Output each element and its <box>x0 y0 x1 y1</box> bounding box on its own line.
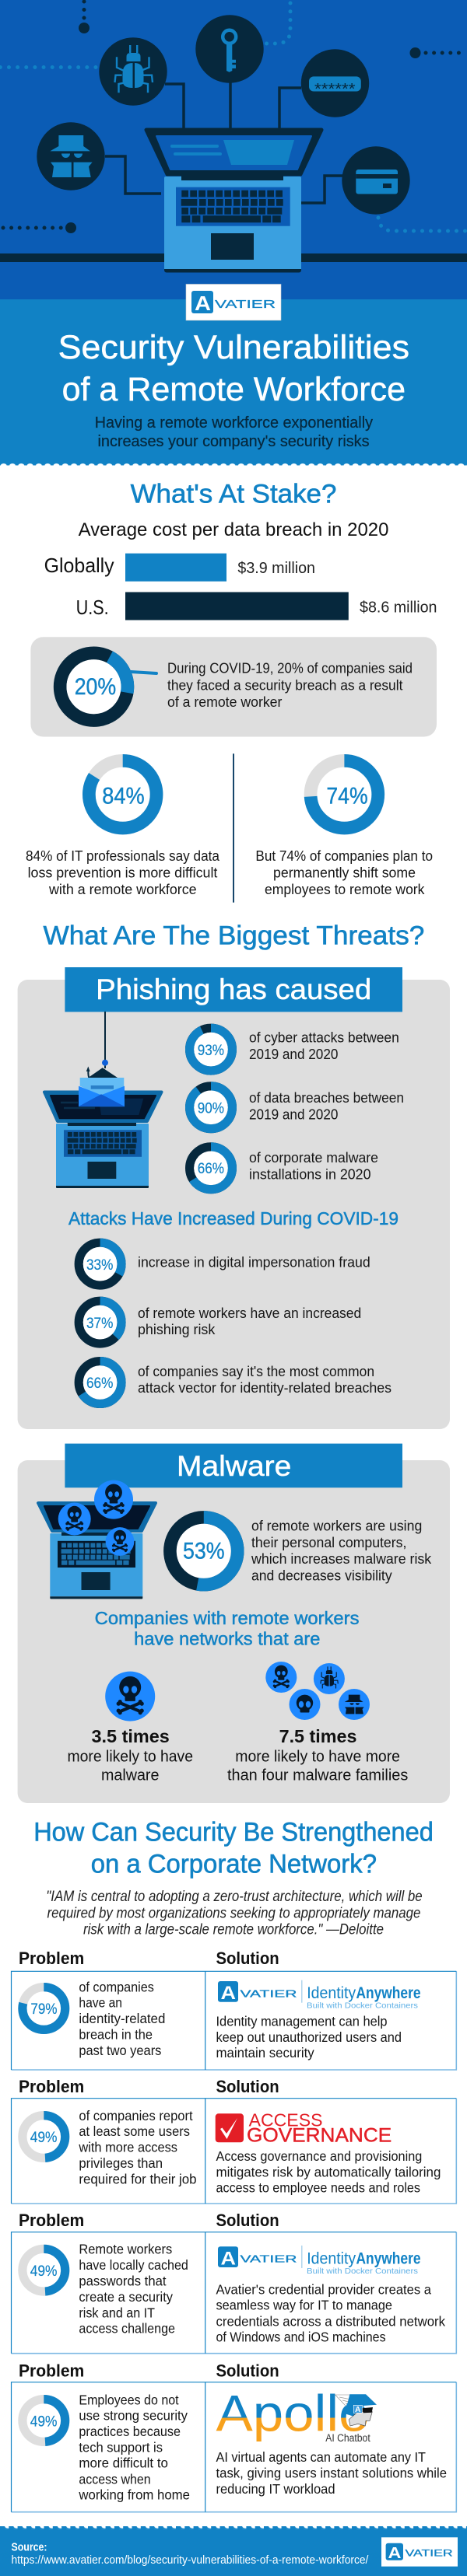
bar chart: breach cost: $3.9 million <box>237 560 315 577</box>
logo: Access Governance: ACCESS <box>249 2109 322 2130</box>
logo: Avatier Identity Anywhere <box>218 2246 420 2276</box>
icon: large skull <box>105 1672 155 1721</box>
icon: password field <box>301 49 369 117</box>
header: phishing has caused <box>65 967 402 1012</box>
logo: Avatier Identity Anywhere: Identity <box>307 1984 356 2002</box>
solution text: mitigates risk by automatically tailoring <box>216 2164 441 2179</box>
problem and solution row 4: Solution <box>216 2361 279 2381</box>
logo: Apollo AI Chatbot: AI Chatbot <box>325 2432 370 2444</box>
panel: 20% stat <box>30 637 437 737</box>
donut: 49% <box>23 2249 65 2291</box>
heading: biggest threats: What Are The Biggest Threats? <box>44 921 424 950</box>
problem text: past two years <box>79 2043 162 2058</box>
donut: 37%: 37% <box>86 1315 113 1332</box>
solution text: reducing IT workload <box>216 2481 335 2497</box>
logo: Avatier Identity Anywhere: Built with Docker Containers <box>307 2001 418 2011</box>
stat: 84%: with a remote workforce <box>48 882 197 897</box>
icon: spy <box>37 122 105 190</box>
text: data breaches: of data breaches between <box>249 1090 404 1106</box>
text: cyber attacks: 2019 and 2020 <box>249 1047 338 1062</box>
problem text: access challenge <box>79 2321 175 2337</box>
problem and solution row 3 <box>11 2211 456 2354</box>
text: phishing risk <box>138 1305 361 1337</box>
problem text: have locally cached <box>79 2257 188 2273</box>
stat: 74%: 74% <box>326 784 368 809</box>
solution text: access to employee needs and roles <box>216 2179 420 2195</box>
stat: 84%: 84% <box>102 784 145 809</box>
donut: 53% <box>170 1517 237 1585</box>
subtitle: increases your company's security risks <box>98 433 369 450</box>
stat text <box>167 661 413 710</box>
dotted circuit lines <box>0 2 467 233</box>
quote: Deloitte: risk with a large-scale remote workforce." —Deloitte <box>83 1922 384 1938</box>
logo: Avatier Identity Anywhere: A <box>221 1983 236 2004</box>
title: Security Vulnerabilities <box>58 329 409 366</box>
quote: Deloitte: "IAM is central to adopting a zero-trust architecture, which will be <box>46 1889 423 1905</box>
bar chart: breach cost <box>44 554 437 620</box>
source text: https://www.avatier.com/blog/security-vulnerabilities-of-a-remote-workforce/ <box>11 2553 369 2567</box>
header: phishing has caused: Phishing has caused <box>96 973 371 1005</box>
logo: Avatier: VATIER <box>215 299 276 311</box>
donut: 49%: 49% <box>30 2129 58 2146</box>
donut: 66% <box>79 1361 121 1403</box>
solution text <box>216 2449 447 2497</box>
donut: 33% <box>79 1243 121 1285</box>
text: phishing risk: phishing risk <box>138 1322 216 1337</box>
solution text: keep out unauthorized users and <box>216 2029 402 2045</box>
stat: 74%: But 74% of companies plan to <box>255 848 433 864</box>
panel: malware <box>18 1444 450 1803</box>
stat text: During COVID-19, 20% of companies said <box>167 661 413 676</box>
stat: 84% <box>26 760 220 897</box>
text: data breaches <box>249 1090 404 1123</box>
hero background <box>0 0 467 299</box>
stat: 74%: permanently shift some <box>273 865 416 880</box>
logo: Access Governance <box>216 2109 392 2146</box>
donut: 20%: 20% <box>75 674 116 700</box>
desk line <box>0 253 467 262</box>
solution text: of Windows and iOS machines <box>216 2330 386 2345</box>
problem text: have an <box>79 1995 122 2011</box>
stat: 74% <box>255 760 433 897</box>
problem text: with more access <box>78 2140 177 2155</box>
icon: password field: ****** <box>314 81 356 98</box>
heading: how can security be strengthened: on a Corporate Network? <box>91 1849 377 1879</box>
solution text: seamless way for IT to manage <box>216 2298 392 2313</box>
problem text: create a security <box>79 2289 173 2305</box>
problem and solution row 3: Problem <box>19 2211 84 2230</box>
logo: Avatier Identity Anywhere: Anywhere <box>356 2249 420 2267</box>
footer <box>0 2526 467 2576</box>
problem text <box>79 2242 188 2337</box>
icon: credit card <box>342 146 410 215</box>
text: personal computers: which increases malware risk <box>251 1551 432 1567</box>
text: cyber attacks: of cyber attacks between <box>249 1029 399 1045</box>
subheading: companies with remote workers: Companies with remote workers <box>95 1608 359 1628</box>
bar chart: breach cost: $8.6 million <box>360 599 437 616</box>
problem text: working from home <box>78 2487 190 2503</box>
stat: 7.5 times <box>227 1726 408 1784</box>
stat: 84%: loss prevention is more difficult <box>28 865 217 880</box>
subtitle <box>95 414 373 450</box>
solution text: Identity management can help <box>216 2014 388 2029</box>
bar chart: breach cost: Globally <box>44 554 114 577</box>
donut: 90%: 90% <box>198 1099 224 1117</box>
problem and solution row 4: Problem <box>19 2361 84 2381</box>
text: corporate malware: of corporate malware <box>249 1150 378 1166</box>
problem text: Employees do not <box>79 2392 179 2407</box>
logo: Avatier Identity Anywhere: Identity <box>307 2249 356 2267</box>
problem text: privileges than <box>79 2155 163 2171</box>
stat: 3.5 times: malware <box>101 1767 159 1784</box>
stat: 7.5 times: than four malware families <box>227 1767 408 1784</box>
quote: Deloitte: required by most organizations seeking to appropriately manage <box>47 1906 420 1922</box>
solution text <box>216 2281 445 2345</box>
stat: 7.5 times: more likely to have more <box>235 1748 400 1765</box>
logo: Avatier <box>381 2537 458 2567</box>
donut: 79%: 79% <box>30 2001 58 2018</box>
problem and solution row 2 <box>11 2077 456 2204</box>
text: personal computers: of remote workers are using <box>251 1518 422 1533</box>
heading: how can security be strengthened <box>33 1818 434 1879</box>
illustration: infected laptop <box>38 1480 156 1599</box>
donut: 90% <box>190 1086 232 1129</box>
logo: Avatier: A <box>388 2545 402 2562</box>
solution text: Access governance and provisioning <box>216 2148 422 2164</box>
solution text: Avatier's credential provider creates a <box>216 2281 431 2297</box>
heading: What's At Stake: What's At Stake? <box>131 480 336 509</box>
donut: 37% <box>79 1301 121 1344</box>
problem text <box>78 2392 190 2503</box>
problem text: of companies report <box>79 2108 193 2123</box>
subheading: companies with remote workers <box>95 1608 359 1649</box>
title: of a Remote Workforce <box>62 371 406 408</box>
subheading: attacks increased: Attacks Have Increased During COVID-19 <box>68 1208 399 1229</box>
icon: skull medium <box>58 1502 91 1535</box>
solution text: AI virtual agents can automate any IT <box>216 2449 426 2465</box>
source text <box>11 2541 369 2567</box>
problem and solution row 4 <box>11 2361 456 2512</box>
stat: 3.5 times <box>67 1726 193 1784</box>
logo: Avatier <box>186 285 281 320</box>
stat text: they faced a security breach as a result <box>167 677 402 693</box>
subheading: average cost: Average cost per data breach in 2020 <box>79 519 388 540</box>
panel: phishing <box>18 967 450 1429</box>
problem and solution row 2: Problem <box>19 2077 84 2096</box>
problem text: breach in the <box>79 2026 153 2042</box>
problem text: of companies <box>79 1979 154 1994</box>
logo: Avatier Identity Anywhere: VATIER <box>240 2253 297 2265</box>
stat text: of a remote worker <box>167 694 282 710</box>
problem text: use strong security <box>79 2408 188 2424</box>
text: attack vector: attack vector for identity-related breaches <box>138 1380 392 1396</box>
title band <box>0 299 467 465</box>
donut: 79% <box>23 1987 65 2029</box>
problem and solution row 1: Solution <box>216 1949 279 1968</box>
icon: bug <box>99 37 167 106</box>
solution text: task, giving users instant solutions while <box>216 2466 447 2481</box>
stat: 3.5 times: 3.5 times <box>92 1726 170 1746</box>
quote: Deloitte <box>46 1889 423 1938</box>
donut: 49% <box>23 2399 65 2441</box>
logo: Avatier Identity Anywhere: Anywhere <box>356 1984 420 2002</box>
subtitle: Having a remote workforce exponentially <box>95 414 373 432</box>
text: impersonation fraud: increase in digital impersonation fraud <box>138 1254 370 1270</box>
header: malware <box>65 1444 402 1487</box>
logo: Apollo AI Chatbot: Apollo <box>216 2385 369 2442</box>
stat: 84%: 84% of IT professionals say data <box>26 848 220 864</box>
text: attack vector: of companies say it's the most common <box>138 1364 374 1379</box>
text: data breaches: 2019 and 2020 <box>249 1107 338 1123</box>
donut: 49%: 49% <box>30 2263 58 2280</box>
icon: skull small <box>106 1527 134 1556</box>
donut: 49% <box>23 2116 65 2158</box>
problem text: passwords that <box>79 2273 167 2288</box>
text: corporate malware <box>249 1150 378 1182</box>
header: malware: Malware <box>177 1450 291 1482</box>
icon: skull large <box>94 1480 133 1519</box>
logo: Avatier: A <box>195 292 211 315</box>
problem text: practices because <box>79 2424 181 2439</box>
problem and solution row 1: Problem <box>19 1949 84 1968</box>
logo: Avatier Identity Anywhere <box>218 1980 420 2011</box>
logo: Apollo AI Chatbot: A <box>355 2406 361 2414</box>
donut: 66% <box>190 1147 232 1190</box>
solution text <box>216 2148 441 2195</box>
stat: 7.5 times: 7.5 times <box>279 1726 356 1746</box>
bar chart: breach cost: U.S. <box>76 596 109 619</box>
problem and solution row 2: Solution <box>216 2077 279 2096</box>
donut: 66%: 66% <box>198 1160 224 1177</box>
stat: 74%: employees to remote work <box>265 882 425 897</box>
solution text <box>216 2014 402 2060</box>
donut: 20% <box>48 641 156 732</box>
text: cyber attacks <box>249 1029 399 1062</box>
problem text: risk and an IT <box>79 2305 155 2320</box>
problem text: access when <box>79 2471 151 2487</box>
problem text <box>78 2108 197 2186</box>
solution text: maintain security <box>216 2045 314 2060</box>
donut: 66%: 66% <box>86 1375 113 1392</box>
logo: Avatier Identity Anywhere: VATIER <box>240 1987 297 1999</box>
donut: 49%: 49% <box>30 2413 58 2430</box>
logo: Avatier: VATIER <box>405 2548 453 2559</box>
donut: 93%: 93% <box>198 1042 224 1059</box>
logo: Avatier Identity Anywhere: Built with Docker Containers <box>307 2267 418 2276</box>
subheading: companies with remote workers: have networks that are <box>134 1629 320 1649</box>
illustration: phishing laptop <box>44 1012 162 1188</box>
text: personal computers: and decreases visibility <box>251 1568 392 1584</box>
stat: 3.5 times: more likely to have <box>67 1748 193 1765</box>
text: personal computers: their personal computers, <box>251 1535 406 1550</box>
problem text <box>79 1979 165 2058</box>
problem text: at least some users <box>79 2123 190 2139</box>
text: corporate malware: installations in 2020 <box>249 1166 370 1182</box>
source text: Source: <box>11 2541 47 2554</box>
logo: Avatier Identity Anywhere: A <box>221 2248 236 2269</box>
problem and solution row 1 <box>11 1949 456 2070</box>
text: attack vector <box>138 1364 392 1396</box>
text: phishing risk: of remote workers have an increased <box>138 1305 361 1321</box>
icon: key <box>195 15 264 83</box>
title <box>58 329 409 408</box>
icons: malware families <box>265 1662 370 1720</box>
laptop illustration <box>146 130 321 272</box>
text: personal computers <box>251 1518 432 1584</box>
heading: how can security be strengthened: How Can Security Be Strengthened <box>33 1818 434 1847</box>
donut: 93% <box>190 1028 232 1071</box>
problem text: tech support is <box>79 2439 163 2455</box>
problem and solution row 3: Solution <box>216 2211 279 2230</box>
donut: 33%: 33% <box>86 1257 113 1274</box>
connector lines <box>105 82 342 203</box>
problem text: more difficult to <box>79 2455 168 2471</box>
problem text: identity-related <box>79 2011 165 2026</box>
problem text: required for their job <box>79 2171 197 2186</box>
solution text: credentials across a distributed network <box>216 2313 445 2329</box>
donut: 53%: 53% <box>183 1539 225 1564</box>
problem text: Remote workers <box>79 2242 172 2257</box>
logo: Access Governance: GOVERNANCE <box>247 2124 392 2146</box>
